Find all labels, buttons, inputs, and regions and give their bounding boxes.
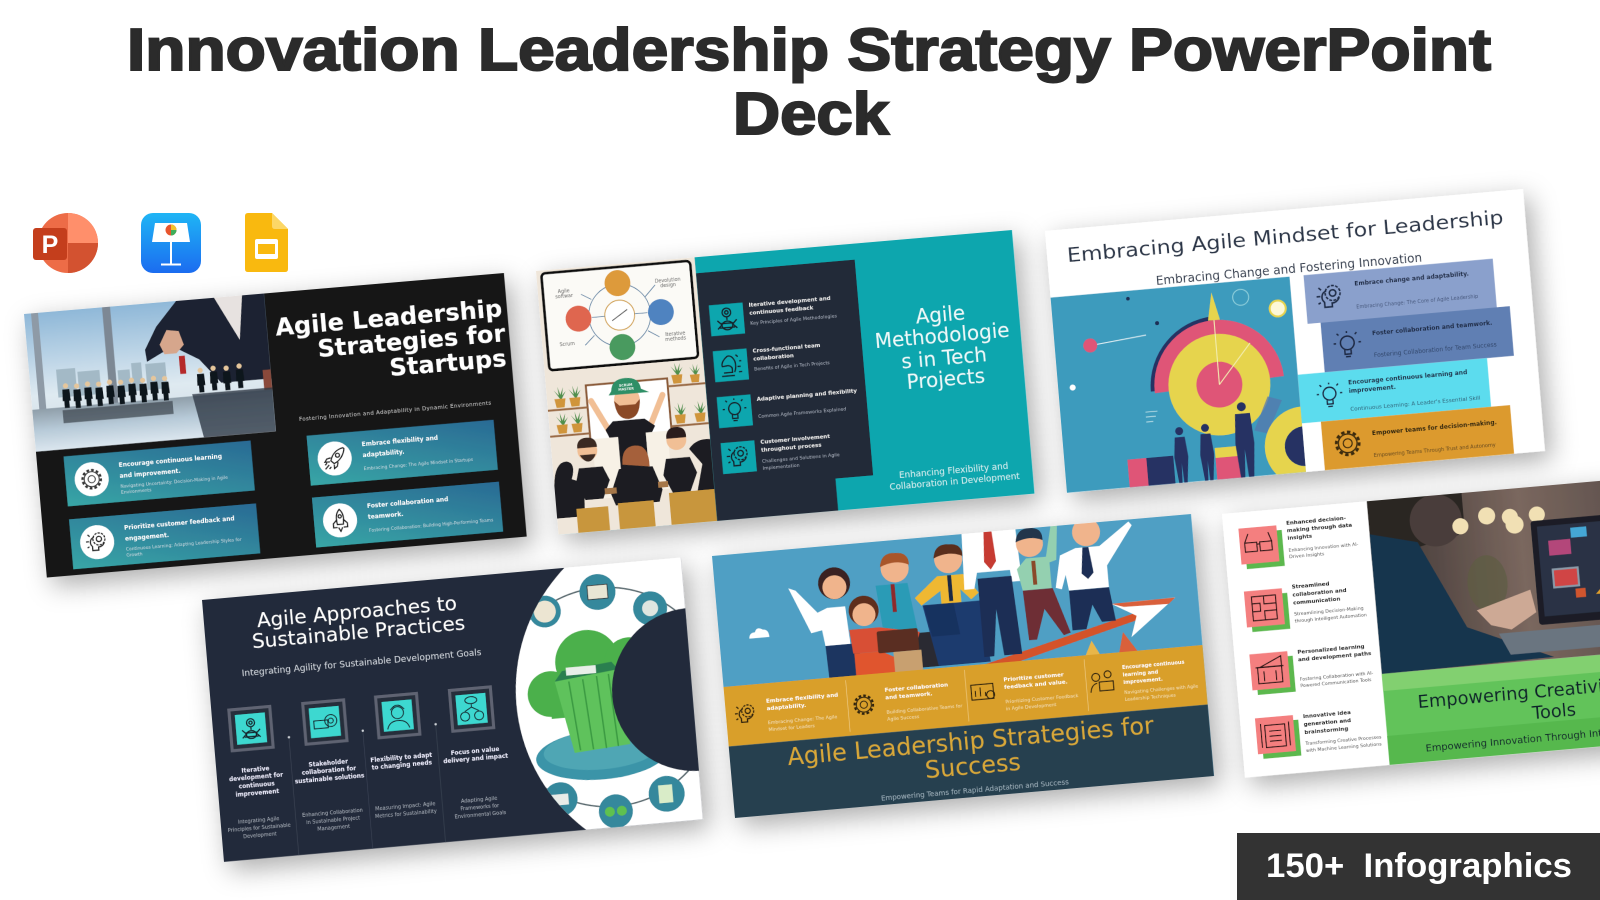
item: streamlined collaboration: collaboration and — [1292, 588, 1347, 599]
icon: Keynote — [141, 213, 201, 273]
item: Cross-functional team: Benefits of Agile in Tech Projects — [754, 360, 831, 373]
step 1: iterative development — [227, 704, 291, 838]
card: Empower teams: Empower teams for decision-making. — [1372, 419, 1497, 437]
step 4: focus on value: delivery and impact — [443, 754, 509, 766]
step 4: focus on value: Focus on value — [451, 747, 500, 757]
feature: Prioritize feedback — [970, 671, 1079, 715]
panel: slide 4, Agile Approaches to Sustainable Practices — [202, 550, 787, 863]
illustration: target and team — [1050, 276, 1306, 494]
whiteboard: agile diagram: methods — [665, 335, 687, 343]
card: Empower teams — [1321, 405, 1514, 470]
girl — [854, 650, 901, 675]
card: Foster collaboration: Foster collaboration and — [367, 497, 449, 510]
item: Customer involvement: throughout process — [761, 443, 822, 454]
step 2: stakeholder collaboration: sustainable solutions — [295, 774, 365, 786]
card: Embrace flexibility: Embracing Change: The Agile Mindset in Startups — [364, 457, 474, 472]
feature: Foster collaboration: and teamwork. — [885, 691, 933, 701]
step 2: stakeholder collaboration: Enhancing Collaboration — [302, 808, 363, 819]
yellow man — [913, 573, 980, 610]
card: Embrace change — [1304, 259, 1497, 324]
teal man — [876, 582, 918, 633]
card: Encourage continuous learning: Environments — [121, 487, 152, 496]
item: Customer involvement: Customer involvement — [760, 434, 831, 446]
step 2: stakeholder collaboration: collaboration for — [302, 766, 357, 777]
panel: slide 2, Agile Methodologies in Tech Projects — [536, 230, 1035, 535]
feature: Encourage learning — [1089, 659, 1199, 706]
dark circle overlay — [612, 608, 700, 772]
item: decision-making: Driven Insights — [1289, 551, 1325, 560]
step 1: iterative development: Integrating Agile — [238, 816, 280, 826]
feature: Embrace flexibility — [734, 692, 841, 736]
feature: Encourage learning: Navigating Challenges with Agile — [1124, 683, 1199, 696]
item: Iterative development: Key Principles of Agile Methodologies — [750, 313, 838, 327]
item: innovative ideas: brainstorming — [1304, 726, 1349, 736]
step 2: stakeholder collaboration: Management — [317, 824, 350, 833]
icon: PowerPoint — [33, 213, 98, 273]
whiteboard: agile diagram: design — [660, 282, 676, 289]
card: Encourage continuous learning: Navigating Uncertainty: Decision-Making in Agile — [120, 475, 228, 490]
feature: Encourage learning: learning and — [1122, 669, 1159, 678]
feature: Foster collaboration: Building Collaborative Teams for — [886, 703, 963, 716]
slide subtitle: Enhancing Flexibility and — [899, 462, 1009, 481]
slide title: Success — [924, 748, 1022, 784]
slide title: Methodologie — [874, 318, 1010, 353]
slide subtitle — [890, 462, 1020, 490]
item: streamlined collaboration: through Intelligent Automation — [1294, 612, 1367, 624]
item: Customer involvement — [721, 433, 841, 475]
badge: 150+ Infographics — [1237, 833, 1600, 900]
slide title: s in Tech — [900, 342, 988, 373]
item: streamlined collaboration: Streamlining Decision-Making — [1294, 606, 1364, 618]
item: personalized learning: Fostering Collaboration with AI- — [1300, 670, 1374, 683]
slide title: Agile — [915, 301, 966, 329]
panel: slide 1, Agile Leadership Strategies for Startups — [24, 273, 527, 578]
seated dark legs — [910, 631, 943, 668]
badge: 150+ Infographics: 150+ Infographics — [1266, 847, 1572, 885]
item: decision-making: making through data — [1287, 523, 1353, 534]
step 4: focus on value: Adapting Agile — [461, 796, 498, 805]
panel: slide 3, Embracing Agile Mindset for Leadership — [1045, 189, 1545, 497]
slide title: Startups — [388, 344, 508, 382]
icon: PowerPoint: P — [42, 231, 58, 259]
feature: Prioritize feedback: feedback and value. — [1004, 679, 1068, 691]
card: Encourage learning: improvement. — [1349, 384, 1396, 395]
card: Encourage continuous learning: Encourage continuous learning — [118, 454, 222, 469]
slide subtitle: Collaboration in Development — [889, 472, 1021, 493]
whiteboard: agile diagram: Scrum — [559, 341, 575, 348]
item: Adaptive planning: Adaptive planning and flexibility — [757, 388, 858, 403]
feature: Foster collaboration: Agile Success — [887, 714, 920, 723]
card: Encourage learning: Encourage continuous learning and — [1348, 369, 1468, 386]
feature: Foster collaboration: Foster collaboration — [884, 682, 948, 694]
feature: Prioritize feedback: in Agile Development — [1006, 702, 1057, 712]
feature: Embrace flexibility: Mindset for Leaders — [768, 723, 816, 733]
illustration: green cloud and bin — [515, 558, 704, 830]
title: Deck — [733, 81, 889, 147]
card: Encourage learning: Continuous Learning: A Leader's Essential Skill — [1350, 396, 1481, 413]
briefcase — [877, 628, 919, 653]
photo: person at laptop — [1367, 470, 1600, 674]
item: streamlined collaboration: communication — [1293, 597, 1341, 607]
slide title — [252, 597, 465, 648]
item: innovative ideas: generation and — [1304, 718, 1351, 728]
whiteboard: agile diagram — [541, 261, 698, 370]
slide title: Agile Leadership — [274, 294, 503, 342]
step 2: stakeholder collaboration — [294, 698, 364, 831]
illustration: scrum team and whiteboard — [536, 257, 717, 535]
item: personalized learning: and development paths — [1298, 651, 1372, 663]
step 4: focus on value — [443, 685, 508, 818]
step 1: iterative development: improvement — [236, 789, 280, 799]
slide subtitle: Fostering Innovation and Adaptability in Dynamic Environments — [299, 400, 492, 423]
step 3: flexibility: Metrics for Sustainability — [375, 809, 437, 820]
slide title: Strategies for — [316, 319, 507, 363]
item: Customer involvement: Challenges and Solutions in Agile — [762, 452, 840, 465]
step 3: flexibility: Measuring Impact: Agile — [375, 801, 436, 813]
step 4: focus on value: Frameworks for — [460, 803, 500, 812]
slide title: Tools — [1530, 699, 1577, 724]
card: Prioritize customer feedback: engagement. — [125, 533, 169, 543]
gold band — [723, 645, 1208, 747]
card: Foster collaboration: Foster collaboration and teamwork. — [1372, 320, 1493, 337]
slide subtitle: Empowering Teams for Rapid Adaptation and Success — [881, 778, 1069, 803]
feature: Prioritize feedback: Prioritize customer — [1003, 672, 1064, 683]
illustration: team on rising arrow — [749, 522, 1176, 678]
item: streamlined collaboration: Streamlined — [1292, 582, 1330, 591]
card: Embrace flexibility: adaptability. — [362, 450, 405, 459]
feature: Embrace flexibility: Embracing Change: The Agile — [768, 714, 838, 726]
slide title: Embracing Agile Mindset for Leadership — [1066, 205, 1504, 267]
green title band — [1382, 645, 1600, 765]
feature: Encourage learning: improvement. — [1123, 676, 1163, 686]
slide subtitle: Integrating Agility for Sustainable Development Goals — [242, 648, 482, 679]
card: Embrace change: Embrace change and adaptability. — [1354, 271, 1469, 288]
illustration: scrum team and whiteboard: SCRUM — [619, 382, 633, 388]
card: Encourage continuous learning: and improvement. — [119, 469, 181, 480]
title — [127, 17, 1491, 147]
card: Foster collaboration: Fostering Collaboration: Building High-Performing Teams — [369, 517, 494, 534]
whiteboard: agile diagram: Agile — [558, 288, 570, 295]
item: innovative ideas: Innovative idea — [1303, 710, 1351, 720]
tall man — [960, 529, 1022, 590]
feature: Foster collaboration — [853, 681, 963, 725]
slide subtitle: Embracing Change and Fostering Innovation — [1155, 251, 1423, 288]
item: innovative ideas: with Machine Learning Solutions — [1306, 741, 1382, 754]
step 3: flexibility — [365, 691, 437, 820]
right man — [1050, 521, 1137, 592]
item: decision-making: Enhancing Innovation with AI- — [1288, 542, 1359, 554]
feature: Embrace flexibility: adaptability. — [766, 703, 806, 712]
item: innovative ideas: Transforming Creative Processes — [1304, 734, 1382, 747]
card: Foster collaboration: Fostering Collaboration for Team Success — [1374, 341, 1497, 359]
feature: Prioritize feedback: Prioritizing Customer Feedback — [1005, 693, 1079, 705]
slide title: Agile Leadership Strategies for — [786, 711, 1155, 771]
card: Prioritize customer feedback — [69, 503, 260, 569]
title: Innovation Leadership Strategy PowerPoint — [127, 17, 1491, 83]
slide title — [276, 299, 506, 376]
slide title — [1417, 669, 1600, 734]
panel: slide 6, Empowering Creativity with AI Tools — [1222, 470, 1600, 778]
step 3: flexibility: Flexibility to adapt — [370, 753, 433, 764]
card: Foster collaboration: teamwork. — [368, 512, 404, 521]
card: Encourage learning — [1298, 358, 1491, 423]
item: decision-making — [1238, 515, 1360, 570]
item: decision-making: Enhanced decision- — [1286, 516, 1346, 527]
slide title: Sustainable Practices — [251, 610, 466, 653]
card: Embrace change: Embracing Change: The Core of Agile Leadership — [1356, 294, 1478, 311]
card: Prioritize customer feedback: Growth — [126, 551, 143, 559]
item: Customer involvement: Implementation — [762, 463, 800, 472]
item: Cross-functional team: collaboration — [753, 353, 794, 363]
icon: Google Slides — [245, 213, 288, 272]
step 1: iterative development: development for — [229, 773, 284, 784]
card: Embrace flexibility: Embrace flexibility and — [361, 436, 438, 448]
step 1: iterative development: Iterative — [241, 766, 270, 774]
slide title — [876, 305, 1009, 391]
card: Embrace flexibility — [307, 420, 498, 486]
feature: Encourage learning: Encourage continuous — [1122, 660, 1185, 671]
panel: slide 5, Agile Leadership Strategies for Success — [712, 509, 1214, 818]
card: Empower teams: Empowering Teams Through Trust and Autonomy — [1374, 442, 1496, 459]
item: personalized learning: Powered Communication Tools — [1300, 677, 1372, 689]
item: Iterative development — [709, 294, 838, 336]
step 1: iterative development: Development — [243, 831, 277, 840]
slide title: Agile Approaches to — [256, 590, 458, 632]
step 2: stakeholder collaboration: in Sustainable Project — [306, 815, 360, 826]
step 4: focus on value: Environmental Goals — [454, 810, 507, 821]
item: Adaptive planning: Common Agile Frameworks Explained — [758, 406, 847, 420]
item: streamlined collaboration — [1244, 579, 1367, 633]
whiteboard: agile diagram: Iterative — [665, 331, 686, 338]
illustration: scrum team and whiteboard: MASTER — [618, 386, 634, 392]
step 3: flexibility: to changing needs — [372, 761, 433, 772]
card: Encourage continuous learning — [64, 441, 255, 506]
card: Foster collaboration — [312, 482, 503, 548]
feature: Encourage learning: Leadership Techniques — [1125, 692, 1177, 703]
card: Prioritize customer feedback: Continuous Learning: Adapting Leadership Styles for — [126, 537, 242, 553]
item: Adaptive planning — [717, 385, 859, 428]
item: Cross-functional team — [713, 341, 831, 382]
step 1: iterative development: Principles for Sustainable — [228, 823, 291, 834]
item: decision-making: insights — [1287, 534, 1313, 542]
item: personalized learning: Personalized learning — [1297, 644, 1365, 656]
green man — [1013, 522, 1063, 591]
column dividers — [289, 724, 446, 855]
slide title: Projects — [906, 363, 986, 394]
item: Iterative development: continuous feedback — [749, 305, 814, 317]
photo: businesswoman with figurines — [24, 294, 276, 452]
step 2: stakeholder collaboration: Stakeholder — [308, 759, 348, 768]
item: innovative ideas — [1255, 707, 1383, 759]
item: personalized learning — [1249, 643, 1375, 695]
step 1: iterative development: continuous — [239, 781, 276, 791]
whiteboard: agile diagram: Devolution — [655, 277, 681, 285]
dark content panel — [696, 260, 876, 521]
feature: Embrace flexibility: Embrace flexibility and — [766, 692, 839, 705]
item: Iterative development: Iterative development and — [749, 296, 831, 309]
card: Prioritize customer feedback: Prioritize customer feedback and — [124, 516, 235, 532]
card: Foster collaboration — [1321, 306, 1514, 372]
whiteboard: agile diagram: softwar — [555, 293, 573, 300]
left woman — [788, 583, 850, 649]
item: Cross-functional team: Cross-functional team — [752, 343, 821, 355]
